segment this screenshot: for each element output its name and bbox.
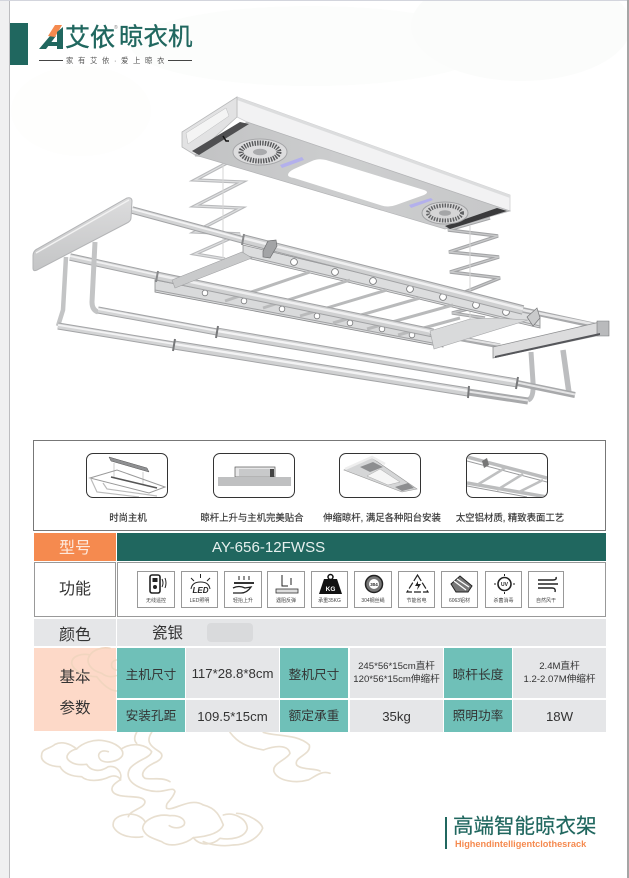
right end plate (493, 321, 609, 358)
dark slot right (445, 208, 507, 229)
icon: load 35 kg: 承重35KG (318, 598, 341, 604)
logo wordmark: brand: 艾依 (65, 24, 115, 52)
spec: hole spacing value: 109.5*15cm (197, 708, 268, 724)
spec: full unit size value: 245*56*15cm直杆 (358, 661, 435, 672)
footer heading: 高端智能晾衣架 (453, 815, 596, 838)
caption: stylish main unit: 时尚主机 (109, 512, 147, 523)
spec: pole length label (444, 648, 512, 698)
caption: telescopic rack: 伸缩晾杆, 满足各种阳台安装 (323, 512, 441, 523)
spec: lighting power value: 18W (546, 708, 573, 724)
support arms (58, 242, 569, 400)
logo slogan: 家有艾依·爱上晾衣 (66, 56, 169, 65)
icon: natural air dry: 自然风干 (536, 598, 556, 604)
colour label (34, 619, 116, 646)
product illustration: drying rack (32, 96, 610, 404)
footer English subtitle: Highendintelligentclothesrack (455, 839, 586, 849)
spec: rated load value (350, 700, 443, 732)
colour name: 瓷银 (152, 625, 183, 642)
spec: rated load label: 额定承重 (289, 709, 339, 723)
icon: LED lighting: LED照明 (190, 598, 209, 604)
purple led strip left (280, 157, 304, 168)
back slotted rail (243, 245, 540, 328)
spec: pole length label: 晾杆长度 (453, 668, 503, 682)
lower drying rod two (58, 325, 528, 401)
icon: 6063 aluminium (441, 571, 478, 608)
rail cross bracket right (430, 318, 528, 349)
icon: UV sterilisation: UV (501, 582, 509, 588)
specs label second line: 参数 (59, 700, 90, 717)
rail clip right (527, 308, 540, 326)
function label: 功能 (59, 581, 91, 598)
scissor lift left (195, 155, 242, 259)
icon: energy saving: 节能省电 (406, 598, 426, 604)
spec: main unit size value (186, 648, 279, 698)
icon: energy saving (398, 571, 435, 608)
spec: full unit size label (280, 648, 348, 698)
icon: light lift: 轻抬上升 (233, 598, 253, 604)
spec: hole spacing label: 安装孔距 (126, 709, 176, 723)
spec: pole length value (513, 648, 606, 698)
lower drying rod one (98, 309, 575, 395)
icon: anti-rebound: 遇阻反弹 (276, 598, 296, 604)
spec: lighting power label: 照明功率 (453, 709, 503, 723)
icon: steel wire 304 (354, 571, 392, 608)
spec: hole spacing label (117, 700, 185, 732)
thumbnail: telescopic rack (339, 453, 421, 498)
spec: rated load value: 35kg (382, 708, 411, 724)
rail cross bracket left (172, 252, 252, 288)
model value: AY-656-12FWSS (212, 539, 325, 556)
colour label: 颜色 (59, 626, 91, 644)
caption: rack flush with unit: 晾杆上升与主机完美贴合 (200, 512, 304, 523)
specs label (34, 648, 116, 731)
slats (225, 272, 460, 335)
logo registered mark: ® (114, 25, 118, 31)
icon: natural air dry (528, 571, 564, 608)
spec: rated load label (280, 700, 348, 732)
model value (117, 533, 606, 561)
thumbnail: rack flush with unit (213, 453, 295, 498)
spec: pole length value: 2.4M直杆 (539, 661, 580, 672)
icon: 6063 aluminium: 6063铝材 (449, 598, 470, 604)
panel: feature thumbnails (33, 440, 606, 531)
icon: LED lighting: LED (192, 586, 209, 595)
spec: pole length value: 1.2-2.07M伸缩杆 (524, 674, 595, 685)
green header tab (10, 23, 28, 65)
purple led strip right (409, 198, 433, 208)
icon: UV sterilisation (485, 571, 522, 608)
icon: LED lighting (181, 571, 218, 608)
rail clip left (263, 240, 277, 258)
colour value (117, 619, 606, 646)
icon: load 35 kg: KG (326, 586, 335, 593)
icon: wireless remote (137, 571, 175, 608)
thumbnail: aluminium finish (466, 453, 548, 498)
housing light panel (288, 159, 427, 206)
icon: logo letter A (39, 25, 63, 49)
specs label first line: 基本 (59, 669, 90, 686)
spec: main unit size value: 117*28.8*8cm (192, 666, 273, 680)
model label: 型号 (59, 540, 91, 556)
scissor lift right (448, 218, 500, 320)
caption: aluminium finish: 太空铝材质, 精致表面工艺 (456, 512, 564, 523)
icon: light lift (224, 571, 262, 608)
icon: UV sterilisation: 杀菌消毒 (493, 598, 514, 604)
icon: steel wire 304: 304钢丝绳 (361, 598, 385, 604)
colour swatch (207, 623, 253, 642)
dark slot left (192, 122, 249, 155)
spec: lighting power label (444, 700, 512, 732)
fan left (233, 139, 287, 165)
icon: load 35 kg (311, 571, 348, 608)
logo (39, 24, 192, 65)
model label (34, 533, 116, 561)
spec: full unit size value (350, 648, 443, 698)
spec: full unit size value: 120*56*15cm伸缩杆 (353, 674, 440, 685)
main housing (182, 97, 510, 229)
icon: wireless remote: 无线遥控 (146, 598, 166, 604)
icon: anti-rebound (267, 571, 305, 608)
spec: main unit size label: 主机尺寸 (126, 668, 176, 682)
function label (34, 562, 116, 617)
spec: main unit size label (117, 648, 185, 698)
back lower rod (70, 256, 500, 346)
spec: full unit size label: 整机尺寸 (289, 668, 339, 682)
footer title block (445, 815, 596, 849)
fan right (422, 202, 468, 224)
thumbnail: stylish main unit (86, 453, 168, 498)
logo wordmark: product: 晾衣机 (119, 24, 192, 51)
front slotted rail (155, 280, 443, 347)
spec: lighting power value (513, 700, 606, 732)
icon: steel wire 304: 304 (370, 582, 378, 587)
back upper rod (132, 209, 597, 326)
spec: hole spacing value (186, 700, 279, 732)
panel: function icons (117, 562, 606, 617)
left end plate (33, 198, 132, 271)
